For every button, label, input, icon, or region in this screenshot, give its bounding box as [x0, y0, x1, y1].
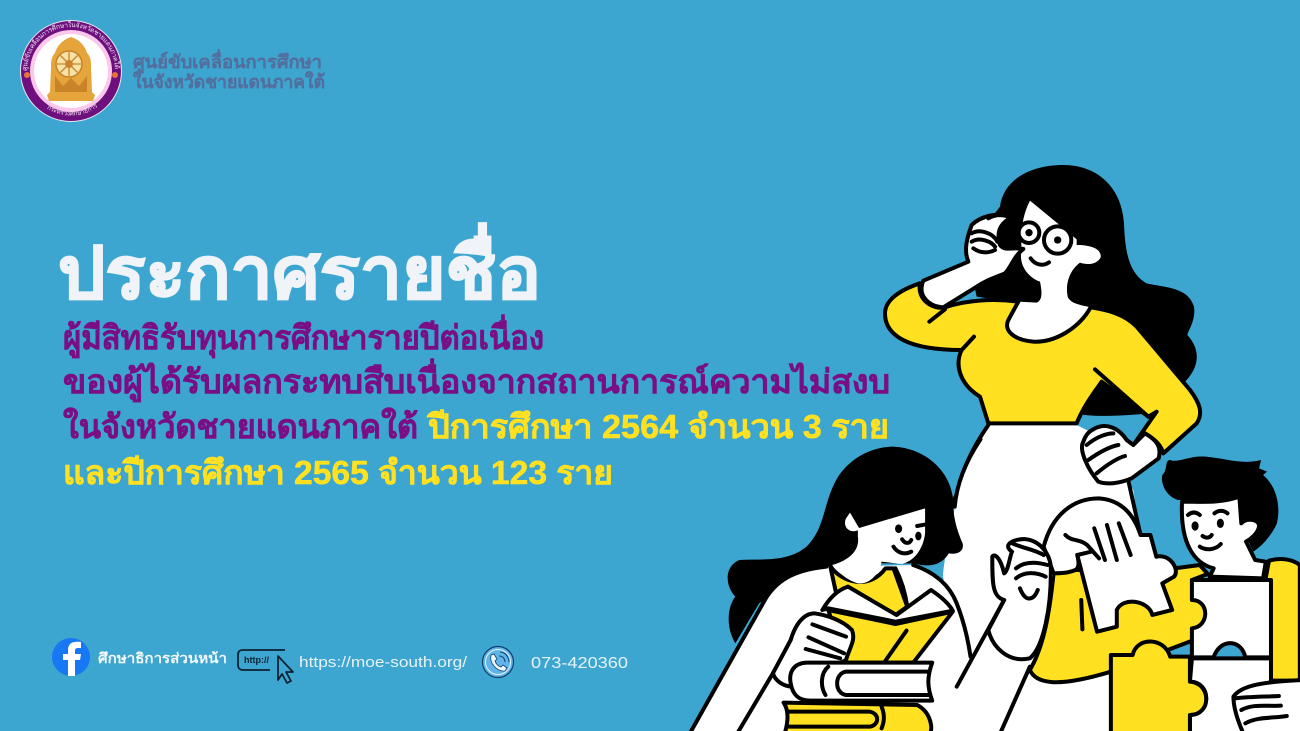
white book: [790, 663, 932, 701]
face and neck: [1007, 201, 1101, 342]
announcement text: ของผู้ได้รับผลกระทบสืบเนื่องจากสถานการณ์ความไม่สงบ: [63, 358, 890, 403]
boy's lower hand: [1233, 680, 1300, 731]
hair: [967, 165, 1197, 416]
boy's raised hand and puzzle piece: [1044, 498, 1176, 632]
announcement text: [63, 314, 890, 491]
illustration: woman with glasses: [885, 165, 1200, 731]
illustration: girl reading: [690, 447, 1004, 731]
logo: ministry seal: ศูนย์ขับเคลื่อนการศึกษาในจังหวัดชายแดนภาคใต้: [23, 21, 120, 70]
skirt: [913, 425, 1167, 731]
facebook page label: ศึกษาธิการส่วนหน้า: [98, 650, 227, 666]
icon: facebook: [52, 638, 90, 676]
icon: http cursor: http://: [244, 655, 269, 665]
logo: ministry seal: [20, 20, 122, 122]
phone number: 073-420360: [531, 655, 628, 672]
illustration: hand on hip: [1082, 426, 1160, 483]
glasses: [1019, 222, 1071, 254]
open book: [822, 587, 953, 663]
skirt lower area: [933, 440, 1127, 731]
sweater: [885, 283, 1200, 453]
smile: [1031, 258, 1049, 265]
puzzle piece: white top right: [1192, 580, 1271, 657]
organisation name: ในจังหวัดชายแดนภาคใต้: [133, 71, 325, 92]
logo: ministry seal: กระทรวงศึกษาธิการ: [47, 104, 97, 116]
title: ประกาศรายชื่อ: [58, 222, 541, 314]
announcement text: ปีการศึกษา 2564 จำนวน 3 ราย: [427, 408, 889, 445]
icon: http cursor: [238, 650, 293, 683]
icon: phone: [482, 646, 514, 678]
girl's body: [690, 565, 971, 731]
announcement text: และปีการศึกษา 2565 จำนวน 123 ราย: [63, 454, 613, 491]
announcement text: ในจังหวัดชายแดนภาคใต้: [63, 407, 418, 445]
organisation name: ศูนย์ขับเคลื่อนการศึกษา: [133, 49, 322, 74]
girl's hand: [773, 613, 853, 687]
announcement text: ผู้มีสิทธิรับทุนการศึกษารายปีต่อเนื่อง: [63, 314, 544, 359]
illustration: boy with puzzle pieces: [933, 439, 1300, 731]
girl's top: [830, 566, 907, 615]
boy's hair: [1162, 456, 1278, 552]
puzzle piece: white bottom right: [1190, 658, 1300, 731]
yellow book: [784, 703, 931, 731]
puzzle piece: yellow bottom left: [1111, 641, 1206, 731]
website url: https://moe-south.org/: [299, 654, 468, 671]
arm and hand: [922, 214, 1023, 307]
organisation name: [133, 49, 325, 92]
boy's face: [1182, 497, 1266, 578]
girl's raised hand: [988, 539, 1051, 659]
girl's hair: [728, 447, 963, 643]
boy's shirt: [1030, 565, 1208, 682]
girl's face: [832, 508, 925, 583]
